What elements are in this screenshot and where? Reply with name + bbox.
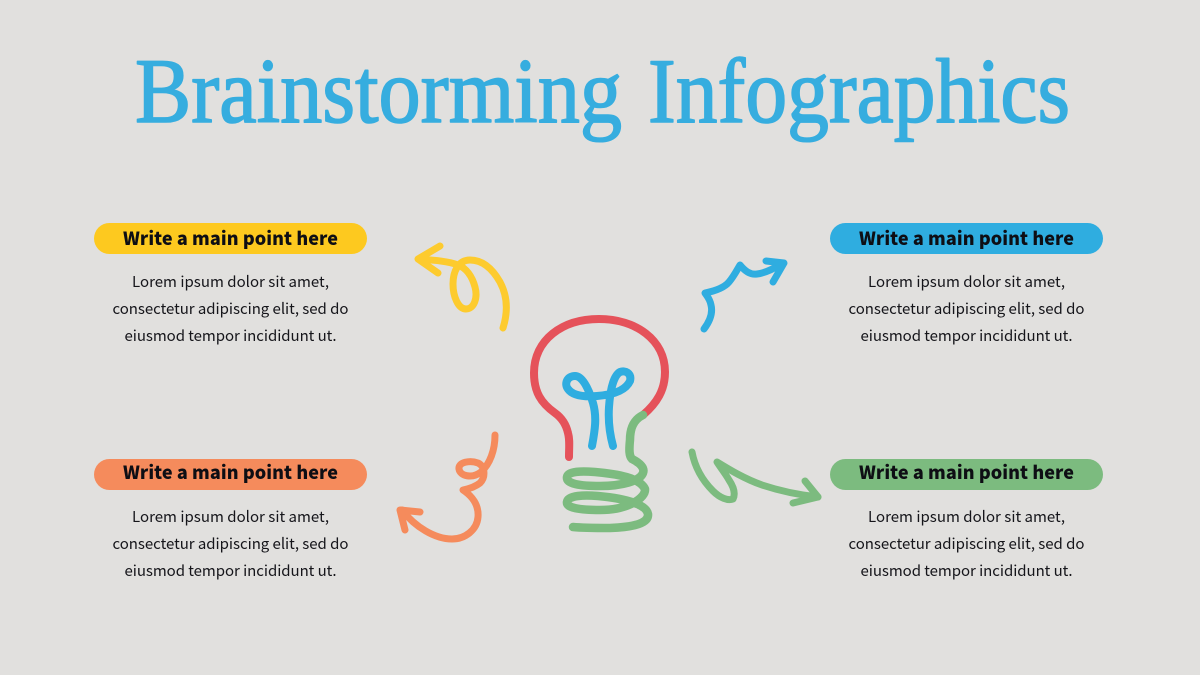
title: Infographics — [648, 40, 1070, 142]
text block: top left: Lorem ipsum dolor sit amet, — [132, 271, 329, 292]
pill: yellow heading — [94, 223, 367, 254]
text block: top right — [848, 271, 1084, 346]
pill: orange heading: Write a main point here — [123, 459, 338, 485]
text block: top left — [112, 271, 348, 346]
text block: bottom left: eiusmod tempor incididunt ut. — [124, 560, 336, 581]
arrow: orange — [400, 435, 495, 539]
text block: top right: consectetur adipiscing elit, sed do — [848, 298, 1084, 319]
icon: light bulb — [534, 319, 665, 528]
pill: green heading — [830, 459, 1103, 490]
arrow: green — [692, 452, 818, 503]
text block: top left: eiusmod tempor incididunt ut. — [124, 325, 336, 346]
pill: yellow heading: Write a main point here — [123, 225, 338, 251]
panel: main point top right — [830, 223, 1103, 346]
panel: main point bottom left — [94, 459, 367, 581]
text block: bottom right: eiusmod tempor incididunt ut. — [860, 560, 1072, 581]
text block: top left: consectetur adipiscing elit, sed do — [112, 298, 348, 319]
text block: bottom left: Lorem ipsum dolor sit amet, — [132, 506, 329, 527]
pill: orange heading — [94, 459, 367, 490]
text block: bottom right: Lorem ipsum dolor sit amet, — [868, 506, 1065, 527]
text block: bottom left — [112, 506, 348, 581]
pill: green heading: Write a main point here — [859, 459, 1074, 485]
arrow: blue — [704, 261, 784, 329]
text block: bottom right: consectetur adipiscing elit, sed do — [848, 533, 1084, 554]
arrow: yellow — [418, 246, 506, 328]
panel: main point top left — [94, 223, 367, 346]
text block: top right: Lorem ipsum dolor sit amet, — [868, 271, 1065, 292]
panel: main point bottom right — [830, 459, 1103, 581]
text block: top right: eiusmod tempor incididunt ut. — [860, 325, 1072, 346]
text block: bottom left: consectetur adipiscing elit, sed do — [112, 533, 348, 554]
title — [135, 40, 1070, 142]
title: Brainstorming — [135, 40, 622, 142]
pill: blue heading: Write a main point here — [859, 225, 1074, 251]
pill: blue heading — [830, 223, 1103, 254]
text block: bottom right — [848, 506, 1084, 581]
